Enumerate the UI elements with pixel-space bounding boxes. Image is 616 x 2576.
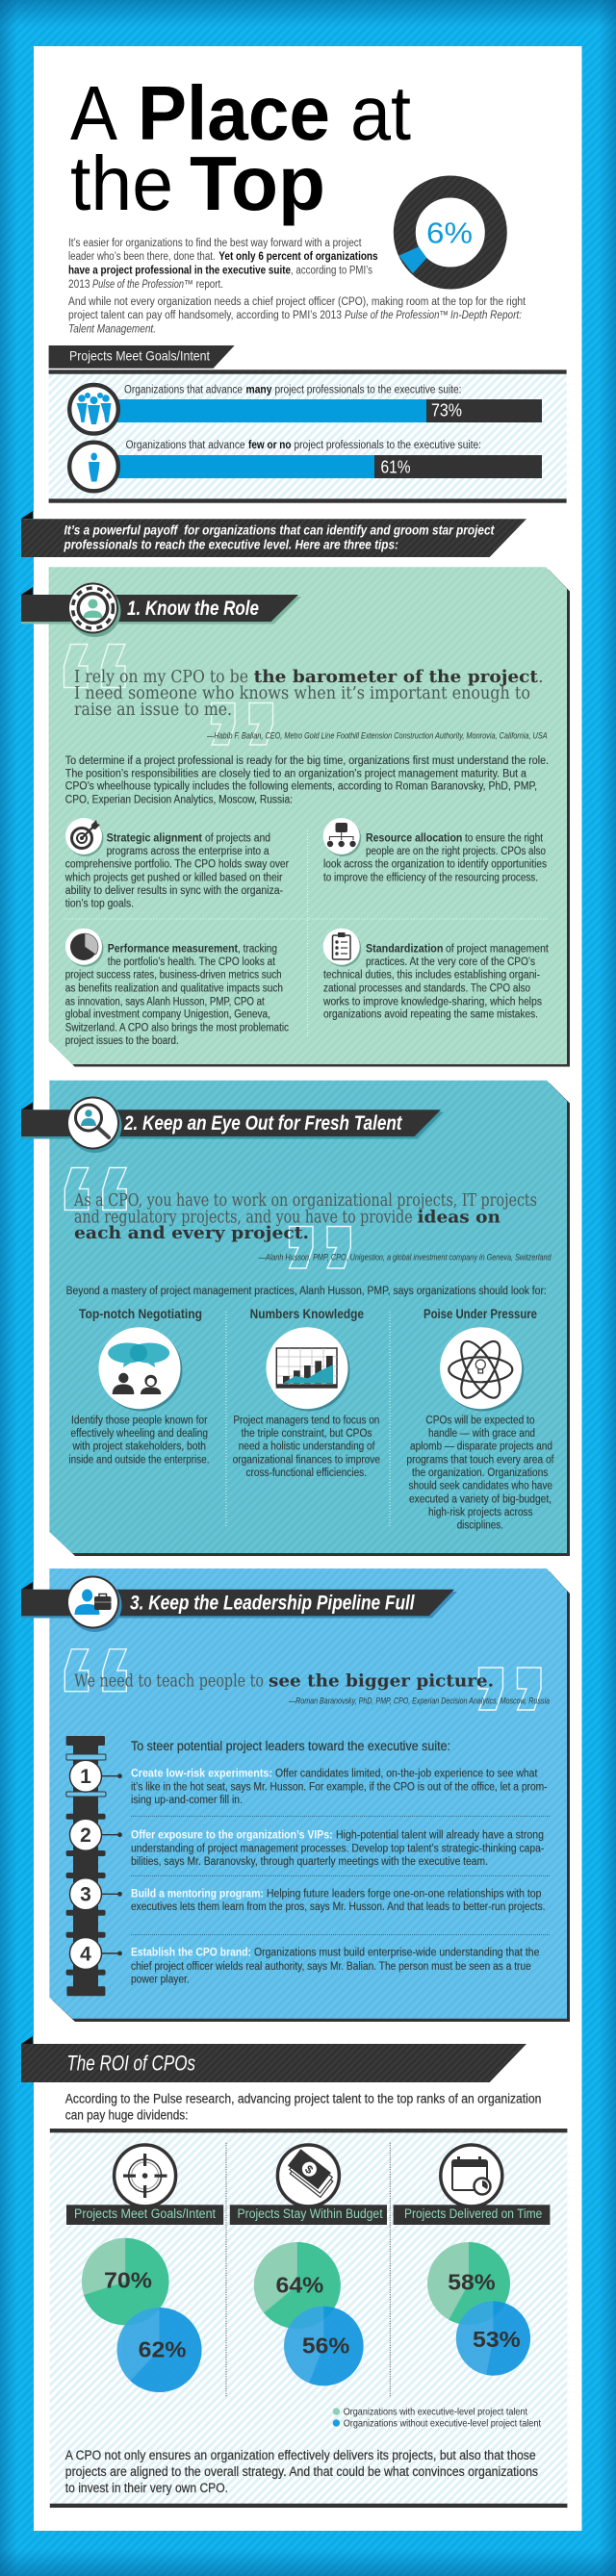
banner: three tips: It’s a powerful payoff for organizations that can identify and groom star project [64, 523, 496, 538]
element: strategic alignment: programs across the enterprise into a [107, 846, 270, 857]
intro text: Pulse of the Profession [92, 279, 184, 291]
step text 1: ising up-and-comer fill in. [131, 1795, 243, 1806]
bar: many professionals 73%: Organizations that advance [124, 384, 243, 395]
column: numbers knowledge: the triple constraint, but CPOs [242, 1428, 372, 1440]
label: projects stay within budget [230, 2205, 387, 2225]
icon: money: $ [302, 2162, 316, 2177]
step number 1: 1 [80, 1766, 91, 1788]
pie chart: goals 70% [82, 2238, 169, 2325]
element: strategic alignment: Strategic alignment [107, 832, 202, 844]
intro text: Pulse of the Profession™ [345, 310, 449, 321]
pie chart: budget 56%: 56% [302, 2333, 349, 2358]
element: performance measurement: Performance measurement [108, 944, 238, 956]
column: poise under pressure: high-risk projects across [428, 1507, 533, 1518]
column: top-notch negotiating: inside and outside the enterprise. [68, 1454, 210, 1466]
intro text: Yet only 6 percent of organizations [218, 251, 378, 263]
panel: 1. know the role [21, 567, 570, 1066]
bar: few professionals 61%: few or no [248, 440, 291, 451]
step number 3 [69, 1878, 122, 1910]
step text 2: Offer exposure to the organization’s VIPs: [131, 1830, 333, 1842]
column: poise under pressure: aplomb — disparate projects and [410, 1441, 552, 1453]
label: projects meet goals [66, 2205, 223, 2225]
heading: 1. know the role [21, 587, 301, 624]
intro text: project talent can pay off handsomely, according to PMI’s 2013 [68, 310, 342, 321]
pie chart: on time 58%: 58% [448, 2269, 496, 2294]
intro text: 2013 [68, 279, 90, 291]
step number 3: 3 [80, 1884, 91, 1906]
heading: the ROI of CPOs: The ROI of CPOs [66, 2052, 195, 2076]
title: Place [138, 70, 330, 156]
quote [74, 1671, 494, 1692]
quote marks: open [64, 645, 125, 687]
pie chart: on time 58% [427, 2242, 510, 2325]
quote: I need someone who knows when it’s important enough to [74, 684, 530, 703]
step text 3: Helping future leaders forge one-on-one relationships with top [267, 1889, 541, 1900]
intro sentence: ROI [65, 2092, 541, 2123]
element: performance measurement: project issues to the board. [65, 1035, 179, 1047]
pie chart: on time 53%: 53% [473, 2327, 521, 2352]
intro sentence: To steer potential project leaders toward the executive suite: [131, 1739, 450, 1753]
intro text: In-Depth Report: [450, 310, 522, 321]
element: strategic alignment: of projects and [205, 832, 270, 844]
legend: Organizations with executive-level project talent [344, 2407, 527, 2417]
column: poise under pressure [406, 1307, 554, 1532]
heading: 2. keep an eye out [21, 1102, 444, 1139]
step text 4: Establish the CPO brand: [131, 1948, 251, 1959]
element: performance measurement: , tracking [238, 944, 277, 956]
bar: few professionals 61% [116, 440, 542, 478]
closing text [65, 2448, 538, 2495]
body text: CPO’s wheelhouse typically includes the following elements, according to Roman Baranovsky, PhD, PMP, [65, 781, 537, 793]
body text: To determine if a project professional is ready for the big time, organizations first must understand the role. [65, 755, 549, 767]
intro sentence: ROI: can pay huge dividends: [65, 2108, 189, 2123]
pie chart: budget 64%: 64% [275, 2272, 323, 2297]
element: standardization: of project management [446, 944, 550, 956]
element: performance measurement: Switzerland. A CPO also brings the most problematic [65, 1022, 289, 1033]
bar: many professionals 73%: project professionals to the executive suite: [275, 384, 462, 395]
element: performance measurement: as benefits realization and qualitative impacts such [65, 983, 283, 995]
bar: many professionals 73% [116, 384, 542, 422]
step text 4: Organizations must build enterprise-wide understanding that the [254, 1948, 539, 1959]
quote: raise an issue to me. [74, 701, 232, 720]
element: strategic alignment: comprehensive portfolio. The CPO holds sway over [65, 859, 289, 871]
intro text: ™ report. [184, 279, 223, 291]
quote marks: open [64, 1168, 126, 1211]
donut chart: 6% [398, 187, 496, 278]
intro text [68, 238, 526, 336]
intro text: It’s easier for organizations to find the best way forward with a project [68, 238, 362, 249]
icon: gear with person [67, 583, 121, 637]
heading: the ROI of CPOs [21, 2036, 526, 2082]
step text 1: it’s like in the hot seat, says Mr. Husson. For example, if the CPO is out of the office, let a prom- [131, 1782, 548, 1794]
element: resource allocation [323, 818, 547, 883]
bar: many professionals 73%: many [246, 384, 272, 395]
column: numbers knowledge: need a holistic understanding of [239, 1441, 375, 1453]
title: Top [190, 140, 325, 226]
icon: executive with briefcase [66, 1576, 121, 1632]
icon: crosshair target [115, 2145, 176, 2206]
heading: 3. keep the leadership pipeline: 3. Keep the Leadership Pipeline Full [130, 1592, 416, 1614]
column: numbers knowledge [233, 1307, 380, 1479]
icon: atom with light bulb [449, 1336, 512, 1403]
panel: goals comparison [49, 370, 567, 503]
label: projects stay within budget: Projects Stay Within Budget [237, 2206, 383, 2221]
step text 2: High-potential talent will already have a strong [336, 1830, 544, 1842]
closing text: A CPO not only ensures an organization effectively delivers its projects, but also that those [65, 2448, 536, 2462]
pie chart: goals 70%: 70% [104, 2267, 152, 2292]
closing text: to invest in their very own CPO. [65, 2481, 228, 2495]
banner: three tips: professionals to reach the executive level. Here are three tips: [64, 537, 398, 552]
quote [73, 1191, 537, 1243]
quote marks: open [64, 1649, 126, 1692]
icon: target [71, 820, 100, 849]
step number 1 [69, 1760, 122, 1792]
column: poise under pressure: CPOs will be expected to [425, 1415, 535, 1426]
column: top-notch negotiating: Top-notch Negotiating [79, 1307, 202, 1321]
step text 3: Build a mentoring program: [131, 1889, 264, 1900]
quote: . [538, 668, 544, 687]
step number 4: 4 [80, 1943, 91, 1965]
element: resource allocation: to ensure the right [465, 832, 544, 844]
icon: calendar and clock [441, 2145, 502, 2206]
column: numbers knowledge: Project managers tend to focus on [233, 1415, 379, 1426]
column: poise under pressure: Poise Under Pressure [424, 1307, 537, 1321]
intro text: Talent Management. [68, 324, 156, 336]
heading: projects meet goals [49, 345, 235, 369]
element: performance measurement: the portfolio’s health. The CPO looks at [108, 956, 276, 968]
bar: few professionals 61%: Organizations that advance [126, 440, 245, 451]
label: projects delivered on time: Projects Delivered on Time [404, 2206, 542, 2221]
step text 4: power player. [131, 1975, 190, 1986]
intro text: leader who’s been there, done that. [68, 251, 216, 263]
step text 4: chief project officer wields real authority, says Mr. Balian. The person must be seen as a true [131, 1961, 531, 1973]
quote: each and every project. [74, 1223, 309, 1243]
intro text: have a project professional in the executive suite [68, 266, 291, 277]
icon: group of people [69, 385, 118, 434]
element: standardization: zational processes and standards. The CPO also [323, 983, 530, 995]
quote: see the bigger picture. [269, 1671, 494, 1692]
pie chart: on time 53% [456, 2301, 530, 2376]
column: numbers knowledge: organizational finances to improve [233, 1454, 380, 1466]
heading: 2. keep an eye out: 2. Keep an Eye Out for Fresh Talent [123, 1112, 402, 1135]
pie chart: goals 62%: 62% [139, 2336, 187, 2361]
step text 1: Offer candidates limited, on-the-job experience to see what [275, 1769, 538, 1780]
element: resource allocation: look across the organization to identify opportunities [323, 859, 547, 871]
label: projects delivered on time [394, 2205, 550, 2225]
legend: Organizations without executive-level project talent [344, 2418, 541, 2429]
icon: magnifier with person [66, 1097, 121, 1153]
intro text: , according to PMI’s [291, 266, 372, 277]
step text 3: executives lets them learn from the pros, says Mr. Husson. And that leads to better-run projects. [131, 1901, 545, 1913]
quote [74, 667, 544, 720]
pie chart: goals 62% [117, 2308, 202, 2392]
heading: projects meet goals: Projects Meet Goals/Intent [69, 348, 210, 364]
icon: org chart [327, 823, 356, 847]
element: standardization [322, 929, 550, 1021]
icon: single person [69, 443, 118, 491]
element: performance measurement [65, 929, 289, 1047]
panel: ROI charts [50, 2129, 567, 2508]
icon: negotiating people [108, 1343, 169, 1394]
element: resource allocation: people are on the right projects. CPOs also [366, 846, 546, 857]
body text: CPO, Experian Decision Analytics, Moscow, Russia: [65, 794, 293, 805]
column: poise under pressure: programs that touch every area of [406, 1454, 554, 1466]
quote: and regulatory projects, and you have to provide [74, 1209, 413, 1228]
column: poise under pressure: disciplines. [457, 1520, 503, 1532]
step text 2 [131, 1830, 544, 1868]
step number 2: 2 [80, 1824, 91, 1847]
legend [333, 2407, 541, 2429]
step text 2: bilities, says Mr. Baranovsky, through quarterly meetings with the executive team. [131, 1856, 488, 1868]
panel: 2. keep an eye out [21, 1081, 570, 1556]
intro sentence: ROI: According to the Pulse research, advancing project talent to the top ranks of an organization [65, 2092, 541, 2106]
column: poise under pressure: should seek candidates who have [408, 1480, 552, 1492]
column: poise under pressure: the organization. Organizations [412, 1467, 549, 1479]
bar: many professionals 73%: 73% [431, 401, 462, 421]
bar: few professionals 61%: 61% [381, 458, 410, 477]
column: top-notch negotiating: Identify those people known for [71, 1415, 208, 1426]
quote marks: close [212, 702, 273, 745]
title: A [70, 70, 118, 156]
element: strategic alignment [64, 818, 289, 910]
closing text: projects are aligned to the overall strategy. And that could be what convinces organizations [65, 2464, 538, 2479]
element: standardization: organizations avoid repeating the same mistakes. [323, 1009, 538, 1021]
element: standardization: Standardization [366, 944, 443, 956]
pie chart: budget 64% [254, 2242, 341, 2329]
column: poise under pressure: handle — with grace and [428, 1428, 535, 1440]
intro text: And while not every organization needs a chief project officer (CPO), making room at the top for the right [68, 296, 526, 308]
element: standardization: technical duties, this includes establishing organi- [323, 970, 540, 982]
element: strategic alignment: tion’s top goals. [65, 899, 134, 910]
body text: The position’s responsibilities are closely tied to an organization’s project management maturity. But a [65, 768, 527, 779]
step text 2: understanding of project management processes. Develop top talent’s strategic-thinking capa- [131, 1844, 544, 1855]
icon: pie chart [70, 933, 98, 960]
quote: the barometer of the project [254, 667, 539, 687]
column: top-notch negotiating [68, 1307, 210, 1466]
label: projects meet goals: Projects Meet Goals/Intent [74, 2206, 216, 2221]
title: at [350, 70, 411, 156]
pie chart: budget 56% [284, 2307, 364, 2385]
element: strategic alignment: ability to deliver results in sync with the organiza- [65, 885, 283, 897]
element: performance measurement: as innovation, says Alanh Husson, PMP, CPO at [65, 996, 265, 1007]
column: numbers knowledge: Numbers Knowledge [250, 1307, 364, 1321]
element: resource allocation: Resource allocation [366, 832, 462, 844]
element: strategic alignment: which projects get pushed or killed based on their [64, 872, 283, 883]
element: performance measurement: project success rates, business-driven metrics such [65, 970, 282, 982]
step number 2 [69, 1819, 122, 1850]
quote: I rely on my CPO to be [74, 668, 248, 687]
column: top-notch negotiating: effectively wheeling and dealing [71, 1428, 208, 1440]
column: poise under pressure: executed a variety of big-budget, [409, 1493, 552, 1505]
heading: 1. know the role: 1. Know the Role [127, 598, 259, 620]
step text 1 [131, 1769, 548, 1806]
quote marks: close [289, 1226, 350, 1268]
element: standardization: works to improve knowledge-sharing, which helps [322, 996, 542, 1007]
column: top-notch negotiating: with project stakeholders, both [72, 1441, 206, 1453]
step text 4 [131, 1948, 539, 1986]
title [70, 70, 411, 226]
column: numbers knowledge: cross-functional efficiencies. [246, 1467, 367, 1479]
bar: few professionals 61%: project professionals to the executive suite: [295, 440, 481, 451]
element: standardization: practices. At the very core of the CPO’s [366, 956, 535, 968]
step number 4 [69, 1938, 122, 1969]
step text 3 [131, 1889, 545, 1913]
banner: three tips [21, 511, 526, 557]
element: resource allocation: to improve the efficiency of the resourcing process. [323, 872, 538, 883]
quote: ideas on [418, 1208, 500, 1228]
title: the [70, 140, 173, 226]
donut chart: 6%: 6% [426, 217, 473, 250]
icon: clipboard [333, 932, 350, 959]
intro sentence: Beyond a mastery of project management practices, Alanh Husson, PMP, says organizations should look for: [66, 1286, 547, 1297]
body text [65, 755, 549, 805]
icon: money [277, 2145, 339, 2206]
quote marks: close [479, 1668, 541, 1710]
icon: laptop chart [276, 1348, 338, 1389]
quote: We need to teach people to [74, 1672, 264, 1692]
panel: 3. keep the leadership pipeline full [21, 1569, 570, 2022]
pillar graphic with numbers [66, 1736, 122, 1996]
element: performance measurement: global investment company Unigestion, Geneva, [65, 1009, 270, 1021]
step text 1: Create low-risk experiments: [131, 1769, 272, 1780]
heading: 3. keep the leadership pipeline [21, 1582, 457, 1619]
